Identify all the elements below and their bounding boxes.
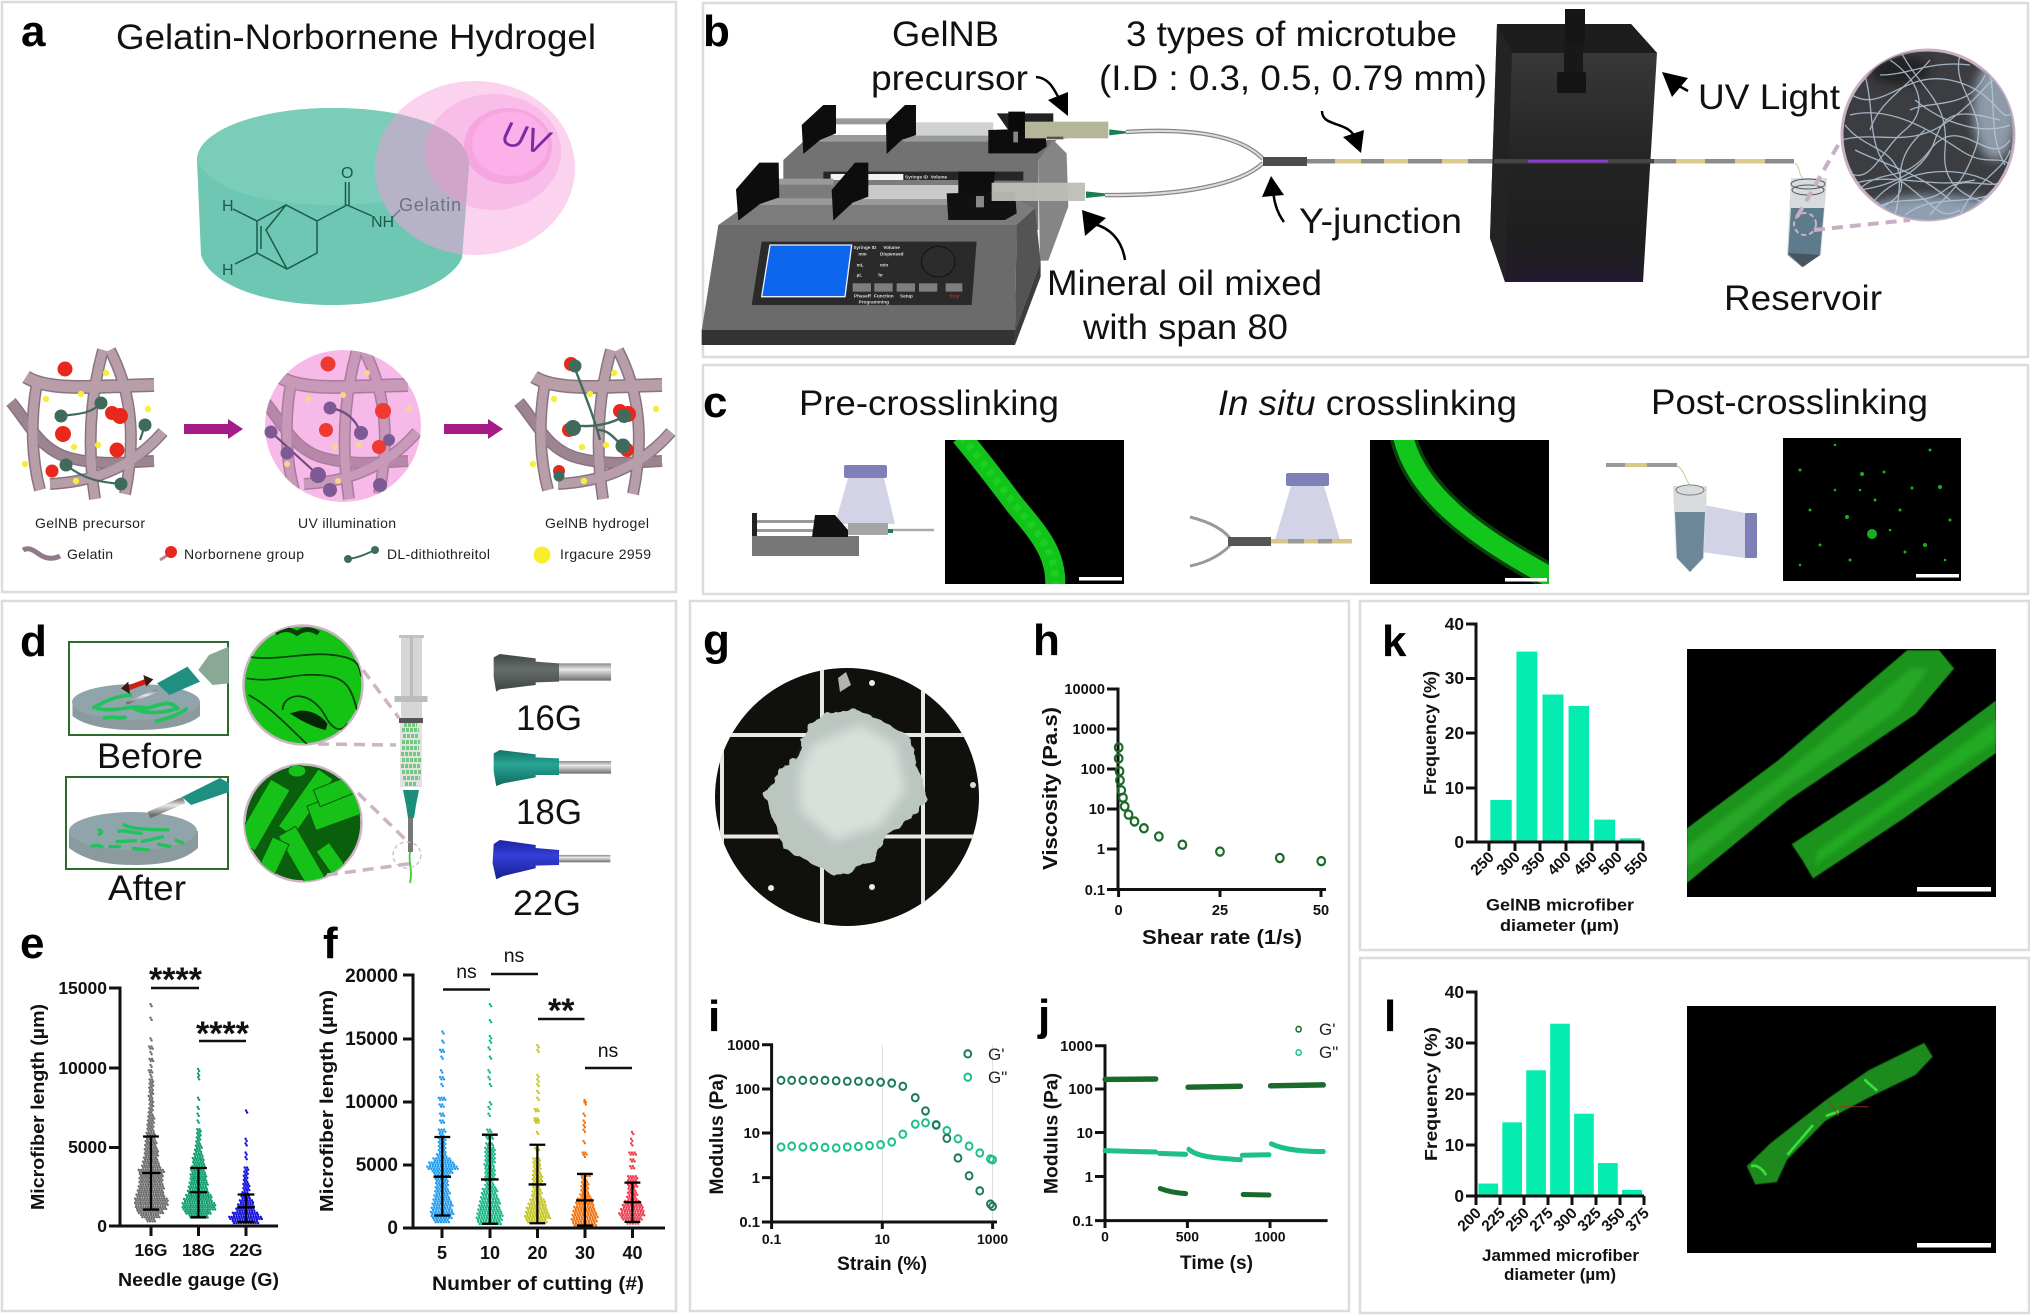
front pump: mm bbox=[858, 252, 867, 257]
histogram k: 500 bbox=[1596, 849, 1626, 879]
histogram k: 350 bbox=[1519, 849, 1549, 879]
front pump: Setup bbox=[900, 293, 913, 298]
chart h: viscosity: 0 bbox=[1115, 903, 1123, 919]
histogram l: Frequency (%) bbox=[1421, 1027, 1441, 1161]
chart j: time sweep: 0.1 bbox=[1072, 1214, 1093, 1230]
panel label c: c bbox=[703, 378, 727, 427]
panel c: crosslinking methods bbox=[703, 365, 2028, 594]
chart i: strain sweep: 10 bbox=[875, 1231, 890, 1247]
needle 16G bbox=[494, 654, 611, 738]
front pump: Function bbox=[874, 293, 894, 298]
labels: (I.D : 0.3, 0.5, 0.79 mm) bbox=[1099, 59, 1487, 98]
chart i: strain sweep: Modulus (Pa) bbox=[707, 1074, 728, 1194]
front pump bbox=[702, 163, 1105, 345]
UV label: UV bbox=[497, 114, 556, 164]
chart j: time sweep: Modulus (Pa) bbox=[1042, 1073, 1062, 1194]
chart f: number of cutting: 15000 bbox=[345, 1029, 398, 1050]
network: GelNB precursor bbox=[11, 350, 163, 499]
chart h: viscosity: 10 bbox=[1089, 802, 1105, 818]
panel k: GelNB fiber diameter bbox=[1360, 601, 2029, 950]
legend bbox=[23, 546, 651, 564]
chart j: time sweep: Time (s) bbox=[1180, 1253, 1253, 1274]
micrograph k bbox=[1687, 649, 1996, 897]
chart h: viscosity: 25 bbox=[1212, 903, 1228, 919]
arrow bbox=[184, 419, 243, 439]
panel label d: d bbox=[20, 617, 47, 666]
chart h: viscosity: 1 bbox=[1097, 842, 1105, 858]
chart f: number of cutting: 40 bbox=[622, 1243, 643, 1263]
chart f: number of cutting: 5000 bbox=[356, 1155, 398, 1176]
photo: jammed microfiber on grid bbox=[715, 668, 979, 926]
chart e: needle gauge: **** bbox=[149, 961, 203, 999]
histogram l: 250 bbox=[1503, 1205, 1533, 1235]
schematic: in situ crosslinking bbox=[1190, 473, 1352, 566]
chart h: viscosity: 100 bbox=[1081, 762, 1105, 778]
histogram l: 375 bbox=[1623, 1205, 1653, 1235]
labels bbox=[871, 15, 1882, 347]
before dish schematic bbox=[69, 642, 229, 735]
network: GelNB hydrogel bbox=[519, 350, 671, 499]
front pump: Volume bbox=[883, 245, 900, 250]
histogram k: 250 bbox=[1468, 849, 1498, 879]
curved arrows bbox=[1036, 72, 1688, 260]
arrow bbox=[444, 419, 503, 439]
network: UV illumination bbox=[264, 350, 421, 502]
panel label f: f bbox=[323, 919, 338, 968]
chart h: viscosity: Viscosity (Pa.s) bbox=[1040, 707, 1062, 870]
chart f: number of cutting: 0 bbox=[387, 1218, 398, 1239]
needle 16G: 16G bbox=[516, 699, 582, 738]
histogram k: 450 bbox=[1571, 849, 1601, 879]
legend: Norbornene group bbox=[184, 546, 304, 562]
back pump: Syringe ID bbox=[905, 174, 929, 179]
network captions: UV illumination bbox=[298, 515, 396, 531]
chart f: number of cutting: Microfiber length (µm) bbox=[317, 990, 337, 1212]
chart f: number of cutting: 5 bbox=[437, 1243, 447, 1263]
histogram k: 40 bbox=[1445, 614, 1464, 634]
chart j: time sweep: 10 bbox=[1077, 1126, 1093, 1142]
front pump: mL bbox=[857, 263, 864, 268]
chart i: strain sweep: G' bbox=[988, 1045, 1004, 1064]
labels: Mineral oil mixed bbox=[1047, 264, 1322, 303]
hydrogel cylinder with UV cone and chemical structure: Gelatin bbox=[399, 195, 461, 215]
chart f: number of cutting: 10000 bbox=[345, 1092, 398, 1113]
histogram l: 0 bbox=[1454, 1186, 1464, 1206]
front pump: Dispensed bbox=[880, 252, 904, 257]
magnified fibers after bbox=[243, 763, 363, 883]
panel label j: j bbox=[1037, 991, 1050, 1040]
micrograph l bbox=[1687, 1006, 1996, 1253]
histogram k: 30 bbox=[1445, 668, 1464, 688]
histogram l: 350 bbox=[1599, 1205, 1629, 1235]
chart e: needle gauge: **** bbox=[196, 1015, 250, 1053]
panel a: gelatin-norbornene hydrogel bbox=[2, 2, 676, 592]
magnified fibers before bbox=[244, 626, 362, 745]
chart f: number of cutting: 10 bbox=[480, 1243, 500, 1263]
chart i: strain sweep: G" bbox=[988, 1068, 1007, 1087]
chart h: viscosity: 0.1 bbox=[1085, 883, 1105, 899]
headings: Post-crosslinking bbox=[1651, 383, 1928, 422]
hydrogel cylinder with UV cone and chemical structure: H bbox=[222, 262, 234, 279]
chart e: needle gauge: 16G bbox=[134, 1240, 168, 1260]
chart j: time sweep: 100 bbox=[1068, 1082, 1093, 1098]
panel g-j: rheology bbox=[690, 601, 1349, 1311]
chart f: number of cutting: ** bbox=[548, 992, 575, 1030]
labels: precursor bbox=[871, 59, 1028, 98]
histogram l: 20 bbox=[1445, 1084, 1464, 1104]
network captions: GelNB precursor bbox=[35, 515, 145, 531]
panel label b: b bbox=[703, 7, 730, 56]
chart j: time sweep: 1 bbox=[1085, 1170, 1093, 1186]
panel l: jammed fiber diameter bbox=[1360, 958, 2029, 1313]
needle 18G: 18G bbox=[516, 793, 582, 832]
chart h: viscosity: 50 bbox=[1313, 903, 1329, 919]
histogram l: 325 bbox=[1575, 1205, 1605, 1235]
tubing and Y-junction bbox=[1105, 131, 1794, 195]
needle gauges bbox=[493, 654, 611, 923]
schematic: post-crosslinking bbox=[1606, 463, 1757, 572]
hydrogel cylinder with UV cone and chemical structure bbox=[197, 81, 575, 305]
chart e: needle gauge: 0 bbox=[97, 1216, 107, 1236]
histogram l: 275 bbox=[1527, 1205, 1557, 1235]
histogram k: 10 bbox=[1445, 778, 1464, 798]
legend: Irgacure 2959 bbox=[560, 546, 651, 562]
panel label a: a bbox=[21, 7, 46, 56]
network captions bbox=[35, 515, 649, 531]
panel label g: g bbox=[703, 616, 730, 665]
histogram k: 550 bbox=[1622, 849, 1652, 879]
chart j: time sweep: G" bbox=[1319, 1043, 1338, 1062]
legend: Gelatin bbox=[67, 546, 113, 562]
histogram k: 300 bbox=[1494, 849, 1524, 879]
chart e: needle gauge: 15000 bbox=[58, 978, 107, 998]
panel label l: l bbox=[1384, 992, 1396, 1041]
chart i: strain sweep: 10 bbox=[744, 1126, 760, 1142]
chart j: time sweep: 1000 bbox=[1254, 1228, 1286, 1244]
chart e: needle gauge: 10000 bbox=[58, 1058, 107, 1078]
histogram k bbox=[1420, 614, 1652, 935]
reservoir tube bbox=[1787, 163, 1827, 267]
chart e: needle gauge: Needle gauge (G) bbox=[118, 1270, 279, 1290]
chart e: needle gauge: 5000 bbox=[68, 1137, 107, 1157]
chart e: needle gauge bbox=[28, 961, 279, 1290]
UV chamber bbox=[1490, 9, 1657, 282]
panel d-f: needle extrusion and length bbox=[2, 601, 676, 1311]
chart i: strain sweep: 1000 bbox=[727, 1038, 760, 1054]
front pump: hr bbox=[878, 273, 883, 278]
chart h: viscosity: Shear rate (1/s) bbox=[1142, 927, 1302, 949]
labels: with span 80 bbox=[1082, 308, 1288, 347]
chart e: needle gauge: 18G bbox=[182, 1240, 215, 1260]
chart j: time sweep: G' bbox=[1319, 1020, 1335, 1039]
histogram l: 200 bbox=[1455, 1205, 1485, 1235]
histogram l bbox=[1421, 982, 1653, 1284]
chart f: number of cutting: 20 bbox=[527, 1243, 548, 1263]
labels: 3 types of microtube bbox=[1126, 15, 1457, 54]
panel label k: k bbox=[1382, 617, 1407, 666]
chart i: strain sweep: 1 bbox=[752, 1171, 760, 1187]
chart j: time sweep: 1000 bbox=[1060, 1039, 1093, 1055]
chart f: number of cutting: ns bbox=[598, 1040, 619, 1062]
micrograph: pre-crosslinking bbox=[945, 436, 1124, 590]
micrograph: in situ crosslinking bbox=[1370, 436, 1556, 584]
hydrogel cylinder with UV cone and chemical structure: H bbox=[222, 198, 234, 215]
after dish schematic bbox=[66, 777, 229, 869]
magnified reservoir image bbox=[1797, 50, 2017, 230]
hydrogel cylinder with UV cone and chemical structure: O bbox=[341, 165, 353, 182]
histogram k: 0 bbox=[1454, 832, 1464, 852]
chart j: time sweep bbox=[1042, 1020, 1338, 1274]
histogram k: 20 bbox=[1445, 723, 1464, 743]
needle 22G: 22G bbox=[513, 884, 581, 923]
dashed zoom lines bbox=[318, 670, 415, 875]
labels: Reservoir bbox=[1724, 279, 1882, 318]
chart i: strain sweep: Strain (%) bbox=[837, 1254, 927, 1275]
chart h: viscosity: 1000 bbox=[1073, 722, 1105, 738]
chart f: number of cutting: ns bbox=[504, 945, 525, 967]
title: Gelatin-Norbornene Hydrogel: Gelatin-Norbornene Hydrogel bbox=[116, 18, 596, 57]
histogram k: Frequency (%) bbox=[1420, 671, 1440, 795]
front pump: Phaseff bbox=[854, 293, 871, 298]
chart e: needle gauge: Microfiber length (µm) bbox=[28, 1004, 48, 1210]
histogram k: 400 bbox=[1545, 849, 1575, 879]
back pump: Volume bbox=[931, 174, 948, 179]
chart f: number of cutting: ns bbox=[456, 961, 477, 983]
label: After: After bbox=[108, 869, 186, 908]
chart i: strain sweep bbox=[707, 1038, 1008, 1275]
front pump: Programming bbox=[859, 299, 889, 304]
chart f: number of cutting: 30 bbox=[575, 1243, 595, 1263]
headings: Pre-crosslinking bbox=[799, 384, 1059, 423]
panel b: microfluidic setup bbox=[702, 3, 2028, 357]
histogram l: diameter (µm) bbox=[1504, 1265, 1616, 1284]
histogram l: 40 bbox=[1445, 982, 1464, 1002]
chart j: time sweep: 500 bbox=[1176, 1228, 1199, 1244]
back pump bbox=[783, 105, 1126, 261]
chart i: strain sweep: 1000 bbox=[977, 1231, 1008, 1247]
hydrogel cylinder with UV cone and chemical structure: NH bbox=[371, 214, 394, 231]
syringe with fibers bbox=[393, 635, 428, 883]
chart j: time sweep: 0 bbox=[1101, 1228, 1109, 1244]
needle 18G bbox=[494, 750, 611, 832]
histogram l: 10 bbox=[1445, 1135, 1464, 1155]
histogram l: 300 bbox=[1551, 1205, 1581, 1235]
chart e: needle gauge: 22G bbox=[229, 1240, 263, 1260]
histogram k: diameter (µm) bbox=[1500, 916, 1619, 935]
network captions: GelNB hydrogel bbox=[545, 515, 649, 531]
chart i: strain sweep: 0.1 bbox=[739, 1215, 760, 1231]
panel label i: i bbox=[708, 992, 720, 1041]
labels: Y-junction bbox=[1299, 202, 1462, 241]
histogram k: GelNB microfiber bbox=[1486, 896, 1634, 914]
front pump: Syringe ID bbox=[853, 245, 877, 250]
labels: GelNB bbox=[892, 15, 999, 54]
syringe pumps bbox=[702, 105, 1126, 345]
chart f: number of cutting: Number of cutting (#) bbox=[432, 1274, 644, 1295]
chart i: strain sweep: 0.1 bbox=[762, 1231, 782, 1247]
chart f: number of cutting: 20000 bbox=[345, 966, 398, 987]
chart i: strain sweep: 100 bbox=[735, 1082, 760, 1098]
histogram l: 225 bbox=[1479, 1205, 1509, 1235]
needle 22G bbox=[493, 840, 610, 923]
front pump: µL bbox=[857, 273, 862, 278]
legend: DL-dithiothreitol bbox=[387, 546, 490, 562]
micrograph: post-crosslinking bbox=[1783, 438, 1961, 581]
histogram l: 30 bbox=[1445, 1033, 1464, 1053]
histogram l: Jammed microfiber bbox=[1482, 1246, 1639, 1265]
label: Before: Before bbox=[97, 737, 203, 776]
chart f: number of cutting bbox=[317, 945, 665, 1295]
panel label e: e bbox=[20, 919, 44, 968]
schematic: pre-crosslinking bbox=[752, 465, 934, 556]
headings bbox=[799, 383, 1928, 423]
front pump: min bbox=[880, 263, 888, 268]
panel label h: h bbox=[1033, 616, 1060, 665]
headings: In situ crosslinking bbox=[1218, 384, 1517, 423]
front pump: Stop bbox=[949, 293, 960, 298]
chart h: viscosity bbox=[1040, 682, 1329, 949]
labels: UV Light bbox=[1698, 78, 1840, 117]
chart h: viscosity: 10000 bbox=[1064, 682, 1105, 698]
